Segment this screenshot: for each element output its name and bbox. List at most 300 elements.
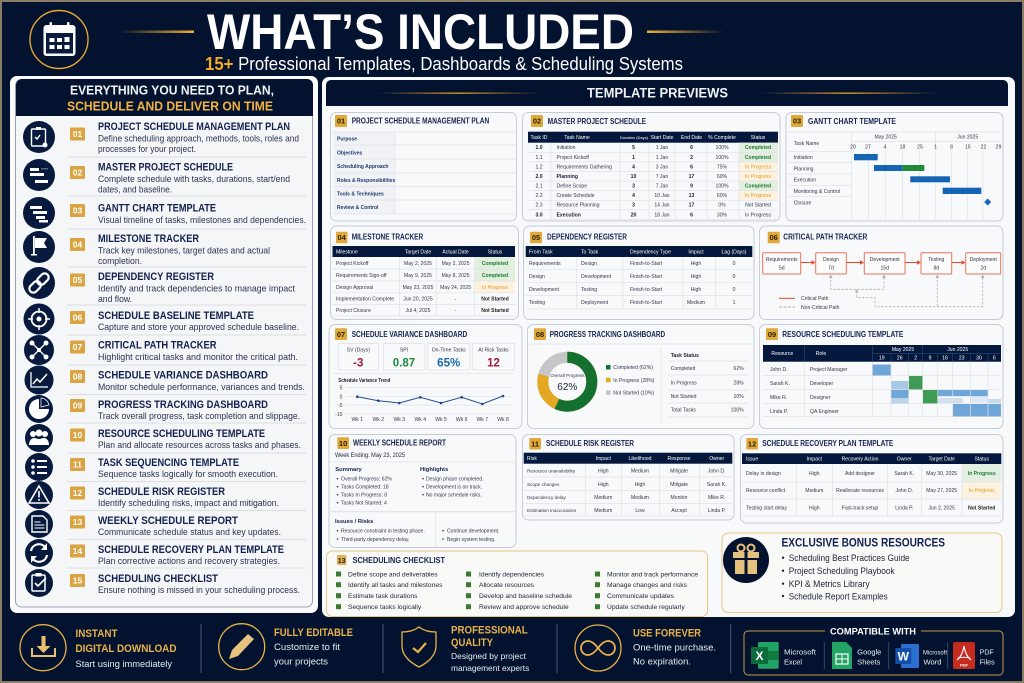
card 10 weekly schedule report [329, 434, 516, 548]
icon: calendar [30, 10, 88, 68]
left panel heading [67, 82, 274, 114]
list item 12: SCHEDULE RISK REGISTER [98, 486, 225, 498]
report issues: Resource constraint in testing phase. [341, 529, 425, 535]
card 13 scheduling checklist: SCHEDULING CHECKLIST [353, 556, 445, 565]
left panel heading: EVERYTHING YOU NEED TO PLAN, [70, 82, 274, 98]
feature: use forever [575, 625, 716, 671]
card 11 schedule risk register: Owner [709, 456, 724, 462]
list item 07: Highlight critical tasks and monitor the critical path. [98, 352, 298, 362]
list item 08: Monitor schedule performance, variances and trends. [98, 382, 305, 392]
card 04 milestone tracker: - [455, 308, 457, 314]
card 04 milestone tracker: Project Kickoff [336, 261, 369, 267]
card 04 milestone tracker: May 9, 2025 [404, 273, 432, 279]
list item 08 [24, 366, 305, 394]
list item 10 [25, 424, 301, 452]
card 04 milestone tracker: Target Date [405, 249, 431, 255]
card 11 schedule risk register: John D. [708, 468, 725, 474]
card 02 master project schedule: 1 Jan [656, 155, 668, 161]
feature: fully editable [219, 624, 353, 670]
report summary: Overall Progress: 62% [341, 477, 392, 483]
icon: excel: Microsoft [784, 648, 817, 657]
icon: google sheets: Google [857, 648, 881, 657]
card 01 project schedule management plan: Purpose [337, 136, 357, 142]
card 02 master project schedule: 3 [632, 203, 635, 209]
list item 02: dates, and baseline. [98, 184, 172, 194]
feature: use forever: One-time purchase. [633, 642, 716, 653]
card 09 resource scheduling template: Role [816, 351, 826, 357]
checklist items [336, 572, 698, 611]
card 02 master project schedule: 17 [689, 174, 694, 180]
card 02 master project schedule: 30% [717, 212, 728, 218]
list item 09: PROGRESS TRACKING DASHBOARD [98, 399, 268, 411]
report highlights: Design phase completed. [426, 477, 483, 483]
card 04 milestone tracker: Jun 20, 2025 [403, 297, 433, 303]
card 02 master project schedule: Resource Planning [556, 203, 600, 209]
card 04 milestone tracker: Completed [482, 261, 508, 267]
card 12 schedule recovery plan template: Recovery Action [842, 456, 879, 462]
title accent line right [647, 30, 725, 33]
card 13 scheduling checklist [326, 551, 708, 616]
critical path flow: 8d [933, 266, 939, 272]
KPI tiles: 65% [437, 358, 460, 370]
icon: pdf: PDF [960, 662, 969, 668]
critical path legend [779, 296, 840, 311]
card 12 schedule recovery plan template: Owner [897, 456, 912, 462]
card 11 schedule risk register: Response [668, 456, 691, 462]
card 03 gantt chart template [786, 112, 1003, 221]
list item 04: MILESTONE TRACKER [98, 233, 199, 245]
task status table: 62% [733, 366, 744, 372]
critical path flow: Design [823, 257, 839, 263]
list item 01: Define scheduling approach, methods, tools, roles and [98, 134, 299, 144]
compatible with box: COMPATIBLE WITH [830, 626, 916, 638]
card 02 master project schedule: 6 [690, 145, 693, 151]
icon: excel: X [755, 649, 764, 663]
card 02 master project schedule: In Progress [745, 174, 771, 180]
card 06 critical path tracker [760, 226, 1003, 320]
card 09 resource scheduling template: May 2025 [892, 347, 914, 353]
card 11 schedule risk register: Monitor [670, 495, 688, 501]
card 11 schedule risk register: Linda P. [708, 508, 726, 514]
list item 05: Identify and track dependencies to manage impact [98, 284, 295, 294]
card 09 resource scheduling template: 9 [929, 356, 932, 362]
card 05 dependency register: 1 [733, 300, 736, 306]
variance line chart: 0 [340, 394, 343, 400]
variance line chart [333, 373, 514, 423]
card 05 dependency register: Impact [688, 249, 704, 255]
critical path flow: 7d [828, 266, 834, 272]
list item 05: and flow. [98, 294, 132, 304]
card 01 project schedule management plan: PROJECT SCHEDULE MANAGEMENT PLAN [352, 117, 489, 126]
feature: instant download [20, 625, 177, 671]
report highlights [420, 467, 483, 499]
feature: professional quality [402, 625, 529, 673]
title: WHAT’S INCLUDED [207, 4, 634, 60]
list item 11: TASK SEQUENCING TEMPLATE [98, 457, 239, 469]
card 02 master project schedule: 100% [715, 155, 729, 161]
card 12 schedule recovery plan template: John D. [896, 488, 913, 494]
list item 02: MASTER PROJECT SCHEDULE [98, 162, 233, 174]
card 04 milestone tracker: May 2, 2025 [442, 261, 470, 267]
donut legend: In Progress (28%) [613, 378, 655, 384]
critical path flow: 15d [880, 266, 889, 272]
KPI tiles: At Risk Tasks [478, 348, 509, 354]
variance line chart: Wk 8 [497, 417, 509, 423]
card 09 resource scheduling template: 30 [976, 356, 982, 362]
list item 02: Complete schedule with tasks, durations, start/end [98, 174, 290, 184]
list item 13 [25, 510, 281, 538]
KPI tiles [338, 343, 515, 370]
feature: fully editable: your projects [274, 657, 328, 668]
card 10 weekly schedule report: 10 [339, 439, 347, 448]
card 09 resource scheduling template: Developer [810, 381, 834, 387]
card 09 resource scheduling template [760, 324, 1003, 428]
card 02 master project schedule: 6 [690, 164, 693, 170]
footer strip [20, 624, 1003, 675]
card 12 schedule recovery plan template: Medium [805, 488, 823, 494]
list item 06: 06 [73, 312, 82, 322]
task status table [661, 348, 748, 424]
panel: template previews [322, 77, 1015, 617]
card 07 schedule variance dashboard [329, 324, 522, 428]
card 03 gantt chart template: 8 [950, 145, 953, 151]
KPI tiles: 0.87 [393, 358, 415, 370]
card 02 master project schedule: 60% [717, 174, 728, 180]
variance line chart: Wk 4 [414, 417, 426, 423]
card 02 master project schedule: 7 Jan [656, 184, 668, 190]
card 11 schedule risk register: Resource unavailability [527, 468, 576, 474]
list item 09: Track overall progress, task completion and slippage. [98, 411, 300, 421]
list item 01: 01 [73, 129, 82, 139]
feature: professional quality: QUALITY [451, 637, 494, 649]
card 05 dependency register: To Task [581, 249, 599, 255]
KPI tiles: 12 [487, 358, 500, 370]
card 09 resource scheduling template: 09 [768, 330, 776, 339]
card 02 master project schedule: Task ID [531, 135, 548, 141]
card 02 master project schedule: Planning [556, 174, 578, 180]
card 05 dependency register: 0 [733, 274, 736, 280]
list item 03: Visual timeline of tasks, milestones and dependencies. [98, 215, 306, 225]
card 04 milestone tracker: Implementation Complete [336, 297, 394, 303]
variance line chart: Wk 1 [351, 417, 363, 423]
card 12 schedule recovery plan template: Not Started [968, 506, 995, 512]
card 02 master project schedule: 1.2 [535, 164, 543, 170]
card 12 schedule recovery plan template: Fast-track setup [842, 506, 878, 512]
feature: instant download: DIGITAL DOWNLOAD [76, 643, 177, 655]
card 11 schedule risk register: High [635, 482, 645, 488]
card 05 dependency register: Finish-to-Start [630, 274, 663, 280]
list item 13: Communicate schedule status and key updates. [98, 527, 281, 537]
card 02 master project schedule: Completed [745, 155, 771, 161]
list item 14: SCHEDULE RECOVERY PLAN TEMPLATE [98, 544, 284, 556]
card 08 progress tracking dashboard [528, 324, 754, 428]
card 02 master project schedule: 9 [690, 184, 693, 190]
checklist items: Define scope and deliverables [348, 572, 438, 578]
card 09 resource scheduling template: John D. [770, 367, 788, 373]
feature: instant download: Start using immediately [76, 659, 172, 670]
card 03 gantt chart template: 29 [996, 145, 1001, 151]
list item 15 [25, 569, 300, 597]
critical path legend: Critical Path [801, 296, 829, 302]
donut legend [606, 365, 655, 397]
KPI tiles: SV (Days) [347, 348, 370, 354]
card 12 schedule recovery plan template: In Progress [968, 471, 996, 477]
checklist items: Monitor and track performance [607, 572, 698, 578]
report summary: Tasks Not Started: 4 [341, 501, 387, 507]
list item 11 [25, 453, 278, 481]
card 11 schedule risk register: Medium [594, 508, 612, 514]
card 03 gantt chart template: 15 [965, 145, 971, 151]
list item 10: Plan and allocate resources across tasks and phases. [98, 440, 301, 450]
variance line chart: 5 [340, 386, 343, 392]
card 03 gantt chart template: 4 [884, 145, 887, 151]
task status table: Not Started [671, 394, 697, 400]
card 02 master project schedule: 10 Jan [654, 193, 670, 199]
header banner [30, 4, 725, 74]
card 02 master project schedule: 17 [689, 203, 694, 209]
bonus list: Scheduling Best Practices Guide [789, 553, 910, 563]
card 01 project schedule management plan [330, 112, 516, 221]
card 12 schedule recovery plan template: 12 [748, 440, 756, 448]
critical path flow: 5d [779, 266, 785, 272]
task status table: 10% [733, 394, 744, 400]
list item 04: Track key milestones, target dates and actual [98, 246, 270, 256]
critical path flow: 2d [980, 266, 986, 272]
card 12 schedule recovery plan template: Delay in design [746, 471, 781, 477]
card 04 milestone tracker: May 24, 2025 [440, 285, 471, 291]
card 02 master project schedule: Project Kickoff [556, 155, 590, 161]
card 03 gantt chart template: 18 [900, 145, 905, 151]
card 02 master project schedule: 5 [632, 145, 635, 151]
card: exclusive bonus resources: EXCLUSIVE BONUS RESOURCES [782, 536, 945, 550]
card 11 schedule risk register: Dependency delay [527, 495, 566, 500]
critical path legend: Non-Critical Path [801, 305, 840, 311]
list item 10: 10 [73, 430, 82, 440]
report highlights: Development is on track. [426, 485, 482, 491]
card 05 dependency register: Testing [581, 287, 597, 293]
card 05 dependency register [524, 226, 754, 320]
card 11 schedule risk register [522, 434, 734, 520]
report summary: Tasks Completed: 18 [341, 485, 389, 491]
card 05 dependency register: Finish-to-Start [630, 300, 663, 306]
variance line chart: Wk 2 [372, 417, 384, 423]
card 05 dependency register: DEPENDENCY REGISTER [547, 233, 627, 242]
card 12 schedule recovery plan template: May 30, 2025 [926, 471, 957, 477]
card 04 milestone tracker: MILESTONE TRACKER [352, 233, 423, 242]
card 11 schedule risk register: Scope changes [527, 482, 560, 487]
card 04 milestone tracker: Milestone [336, 249, 358, 255]
card 06 critical path tracker: 06 [770, 233, 778, 242]
icon: google sheets: Sheets [857, 658, 881, 667]
card 02 master project schedule: 2.2 [535, 193, 543, 199]
list item 13: 13 [73, 517, 82, 527]
card 02 master project schedule: 1 [632, 155, 635, 161]
list item 09 [25, 395, 300, 423]
card 12 schedule recovery plan template [740, 434, 1003, 523]
card 02 master project schedule: End Date [681, 135, 702, 141]
card 11 schedule risk register: Mitigate [670, 482, 688, 488]
card 09 resource scheduling template: Sarah K. [770, 381, 790, 387]
card 02 master project schedule: 10 [631, 174, 636, 180]
list item 02 [23, 159, 290, 194]
icon: pdf: Files [980, 658, 995, 667]
feature: professional quality: Designed by project [451, 651, 527, 661]
card 02 master project schedule: 3.0 [535, 212, 543, 218]
donut chart: 62% [557, 382, 577, 393]
card 02 master project schedule: In Progress [745, 212, 771, 218]
card 02 master project schedule: Task Name [564, 135, 590, 141]
card 05 dependency register: Medium [687, 300, 705, 306]
list item 04: completion. [98, 256, 142, 266]
checklist items: Estimate task durations [348, 593, 418, 600]
report summary [335, 467, 392, 507]
list item 13: WEEKLY SCHEDULE REPORT [98, 515, 238, 527]
card 10 weekly schedule report: Week Ending: May 23, 2025 [335, 452, 406, 459]
donut chart: Overall Progress [550, 373, 585, 378]
card 12 schedule recovery plan template: Reallocate resources [836, 488, 884, 494]
card 12 schedule recovery plan template: Status [974, 456, 989, 462]
card 11 schedule risk register: High [598, 482, 609, 488]
card 11 schedule risk register: Sarah K. [707, 482, 727, 488]
card 03 gantt chart template: Execution [794, 178, 816, 184]
left panel heading: SCHEDULE AND DELIVER ON TIME [67, 98, 273, 114]
card 11 schedule risk register: Estimation inaccuracies [527, 508, 577, 513]
card 02 master project schedule: Execution [556, 212, 581, 218]
card 11 schedule risk register: Medium [631, 495, 649, 501]
report issues: Issues / Risks [335, 519, 373, 525]
donut chart [543, 357, 592, 406]
card 09 resource scheduling template: Jun 2025 [947, 347, 968, 353]
card 04 milestone tracker: - [455, 297, 457, 303]
card 12 schedule recovery plan template: Impact [807, 456, 823, 462]
list item 12: 12 [73, 488, 82, 498]
card 09 resource scheduling template: QA Engineer [810, 409, 839, 415]
bonus list: KPI & Metrics Library [789, 579, 870, 589]
checklist items: Allocate resources [479, 582, 535, 589]
icon: word [895, 644, 947, 668]
compatible with box [744, 626, 1003, 675]
card 11 schedule risk register: Medium [631, 468, 649, 474]
list item 09: 09 [73, 400, 82, 410]
variance line chart: -10 [335, 412, 343, 418]
card 05 dependency register: Development [581, 274, 612, 280]
feature: professional quality: management experts [451, 663, 529, 673]
card 03 gantt chart template: May 2025 [875, 135, 897, 141]
card 02 master project schedule: MASTER PROJECT SCHEDULE [548, 117, 647, 126]
list item 12: Identify scheduling risks, impact and mitigation. [98, 498, 279, 508]
feature: fully editable: FULLY EDITABLE [274, 627, 353, 639]
card 01 project schedule management plan: Tools & Techniques [337, 192, 384, 198]
card 02 master project schedule: 4 [632, 164, 635, 170]
card 12 schedule recovery plan template: High [809, 506, 820, 512]
checklist items: Identify all tasks and milestones [348, 582, 443, 589]
card 05 dependency register: Finish-to-Start [630, 261, 663, 267]
card 11 schedule risk register: Risk [527, 456, 537, 462]
report issues: Begin system testing. [447, 537, 495, 543]
checklist items: Update schedule regularly [607, 604, 685, 611]
card 04 milestone tracker: May 8, 2025 [442, 273, 470, 279]
card 12 schedule recovery plan template: Testing start delay [746, 506, 788, 512]
card: exclusive bonus resources [722, 533, 1002, 612]
card 03 gantt chart template: 25 [917, 145, 923, 151]
list item 01: PROJECT SCHEDULE MANAGEMENT PLAN [98, 121, 290, 133]
list item 11: 11 [73, 460, 82, 470]
card 04 milestone tracker: Design Approval [336, 285, 373, 291]
card 05 dependency register: 0 [733, 261, 736, 267]
card 02 master project schedule: % Complete [708, 135, 736, 141]
list item 05 [23, 267, 295, 304]
card 02 master project schedule: Requirements Gathering [556, 164, 612, 170]
checklist items: Communicate updates [607, 593, 675, 600]
card 12 schedule recovery plan template: May 27, 2025 [926, 488, 957, 494]
variance line chart: Schedule Variance Trend [338, 378, 390, 384]
card 02 master project schedule: 100% [715, 145, 729, 151]
list item 11: Sequence tasks logically for smooth execution. [98, 469, 278, 479]
card 03 gantt chart template: Planning [794, 166, 814, 172]
card 01 project schedule management plan: 01 [337, 117, 345, 126]
card 06 critical path tracker: CRITICAL PATH TRACKER [783, 233, 867, 242]
list item 01 [23, 121, 299, 154]
card 02 master project schedule: 75% [717, 164, 728, 170]
card 02 master project schedule: Duration (Days) [620, 135, 649, 140]
card 11 schedule risk register: Low [635, 508, 645, 514]
card 05 dependency register: Dependency Type [630, 249, 671, 255]
donut legend: Not Started (10%) [613, 391, 654, 397]
card 05 dependency register: 05 [532, 233, 540, 242]
list item 03: 03 [73, 206, 82, 216]
card 02 master project schedule: In Progress [745, 193, 771, 199]
checklist items: Manage changes and risks [607, 582, 688, 589]
card 11 schedule risk register: Accept [671, 508, 687, 514]
icon: google sheets [832, 642, 881, 669]
checklist items: Review and approve schedule [479, 604, 569, 611]
variance line chart: Wk 5 [435, 417, 447, 423]
card 02 master project schedule: 1.0 [535, 145, 543, 151]
card 12 schedule recovery plan template: High [809, 471, 820, 477]
card 03 gantt chart template: 1 [934, 145, 937, 151]
card 03 gantt chart template: 27 [865, 145, 871, 151]
list item 10: RESOURCE SCHEDULING TEMPLATE [98, 428, 265, 440]
bonus list: Project Scheduling Playbook [789, 566, 895, 576]
list item 15: Ensure nothing is missed in your scheduling process. [98, 585, 300, 595]
card 05 dependency register: High [691, 274, 701, 280]
card 03 gantt chart template: 20 [850, 145, 856, 151]
card 02 master project schedule: 1 Jan [656, 145, 668, 151]
icon: excel [751, 642, 817, 669]
card 02 master project schedule: Start Date [651, 135, 674, 141]
card 09 resource scheduling template: Project Manager [810, 367, 848, 373]
card 02 master project schedule: 18 Jan [654, 212, 670, 218]
variance line chart: Wk 7 [476, 417, 488, 423]
card 03 gantt chart template: Jun 2025 [957, 135, 978, 141]
task status table: Completed [671, 366, 696, 372]
report issues [335, 519, 499, 543]
card 04 milestone tracker: May 23, 2025 [403, 285, 434, 291]
heading accent right [760, 92, 937, 94]
list item 15: 15 [73, 576, 82, 586]
card 05 dependency register: Development [529, 287, 560, 293]
card 02 master project schedule: Define Scope [556, 184, 587, 190]
card 01 project schedule management plan: Scheduling Approach [337, 164, 388, 170]
card 04 milestone tracker: Status [488, 249, 503, 255]
KPI tiles: -3 [353, 358, 363, 370]
card 12 schedule recovery plan template: Issue [746, 456, 758, 462]
task status table: 28% [733, 380, 744, 386]
card 04 milestone tracker: May 2, 2025 [404, 261, 432, 267]
card 05 dependency register: High [691, 287, 701, 293]
list item 04: 04 [73, 240, 82, 250]
card 12 schedule recovery plan template: Target Date [929, 456, 955, 462]
